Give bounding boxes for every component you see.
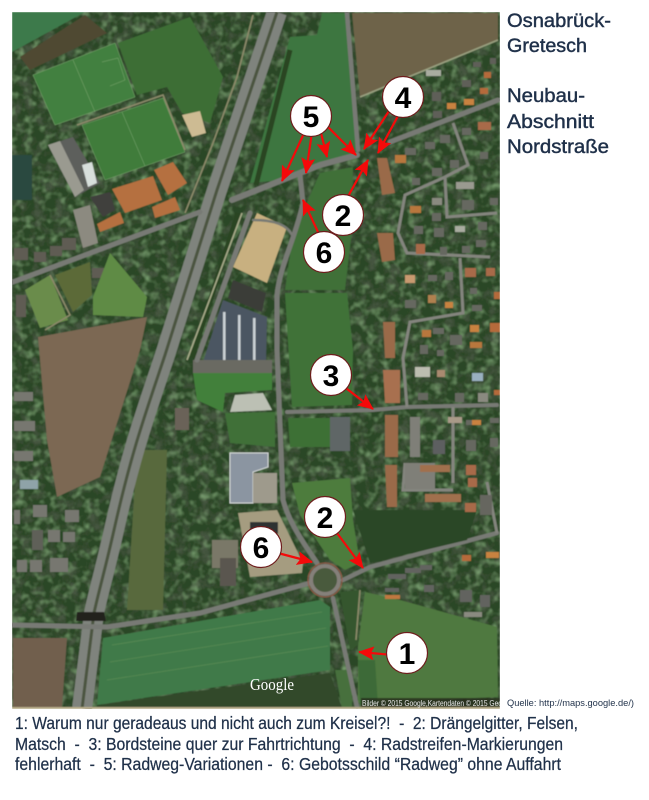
upper marker 2	[322, 194, 364, 236]
upper marker 2: 2	[335, 200, 351, 233]
title: Neubau-	[507, 85, 585, 107]
source credit: Quelle: http://maps.google.de/)	[507, 698, 634, 709]
title: Gretesch	[507, 35, 587, 57]
parking areas	[405, 417, 435, 489]
marker 1: 1	[399, 638, 415, 671]
brown scrub strip	[20, 15, 107, 70]
brown field north-east	[352, 13, 498, 97]
map attribution	[361, 698, 500, 708]
title	[507, 10, 611, 158]
warehouse	[203, 280, 267, 362]
sports field central	[82, 98, 185, 180]
pond	[12, 155, 32, 200]
wood south of neighbourhood	[353, 510, 477, 563]
roads	[13, 13, 498, 707]
arrow for marker 1	[359, 652, 393, 655]
roundabout	[308, 563, 342, 597]
sports field north	[118, 17, 223, 123]
scrub strip in wood	[127, 450, 167, 610]
upper marker 6: 6	[316, 237, 332, 270]
field south-west	[13, 638, 67, 707]
south field	[97, 600, 330, 705]
farm buildings	[175, 408, 238, 586]
houses south of east road	[385, 552, 499, 617]
meadows along Nordstraße	[285, 167, 353, 290]
map bottom edge	[12, 707, 500, 709]
sports club buildings	[48, 137, 115, 248]
lower marker 6: 6	[253, 532, 269, 565]
Google logo: Google	[250, 675, 294, 694]
sports field west	[33, 43, 135, 125]
lawns	[193, 373, 272, 412]
marker 5: 5	[303, 101, 319, 134]
title: Abschnitt	[507, 111, 595, 133]
west meadows	[25, 275, 68, 328]
arrow for marker 3	[338, 382, 373, 409]
dark field south	[97, 673, 342, 709]
title: Osnabrück-	[507, 10, 611, 32]
paths	[45, 15, 498, 640]
top-left field	[12, 12, 85, 52]
construction sand	[233, 213, 287, 283]
arrows for marker 5	[282, 125, 356, 181]
arrow for upper marker 2	[345, 160, 368, 202]
office building	[230, 453, 277, 503]
lower marker 2: 2	[317, 502, 333, 535]
large brown field	[38, 317, 147, 497]
small office building	[230, 393, 272, 412]
tennis courts	[97, 162, 187, 232]
gravel lot	[238, 510, 303, 577]
trees along motorway	[192, 50, 290, 358]
legend text: fehlerhaft - 5: Radweg-Variationen - 6: Gebotsschild “Radweg” ohne Auffahrt	[15, 754, 561, 774]
houses north of road	[426, 58, 496, 118]
marker 3: 3	[323, 360, 339, 393]
legend text	[15, 713, 578, 774]
south-east field	[358, 592, 498, 703]
title: Nordstraße	[507, 136, 609, 158]
lower marker 6	[240, 526, 282, 568]
arrow for lower marker 6	[274, 552, 312, 562]
narrow field by junction	[340, 590, 360, 650]
lot below warehouse	[193, 360, 272, 373]
motorway	[82, 12, 277, 709]
aerial map	[12, 12, 502, 709]
upper field right of motorway	[250, 13, 356, 183]
arrow for lower marker 2	[334, 529, 363, 568]
marker 5	[290, 96, 332, 136]
arrows for marker 4	[364, 108, 399, 153]
western houses	[14, 392, 79, 572]
west residential	[14, 238, 106, 317]
sand pit	[182, 111, 206, 137]
lower marker 2	[304, 496, 346, 538]
marker 4: 4	[395, 82, 412, 115]
marker 1	[386, 632, 428, 674]
marker 3	[310, 354, 352, 396]
neighbourhood roads	[398, 123, 497, 533]
arrow for upper marker 6	[303, 200, 318, 232]
legend text: 1: Warum nur geradeaus und nicht auch zum Kreisel?! - 2: Drängelgitter, Felsen,	[15, 713, 578, 733]
terraced houses	[377, 158, 400, 507]
marker 4	[382, 76, 424, 118]
upper marker 6	[304, 232, 344, 272]
legend text: Matsch - 3: Bordsteine quer zur Fahrtrichtung - 4: Radstreifen-Markierungen	[15, 734, 563, 754]
copyright text: Bilder © 2015 Google,Kartendaten © 2015 Geo	[362, 699, 502, 708]
neighbourhood houses	[330, 122, 500, 515]
motorway bridge shadow	[76, 612, 106, 621]
